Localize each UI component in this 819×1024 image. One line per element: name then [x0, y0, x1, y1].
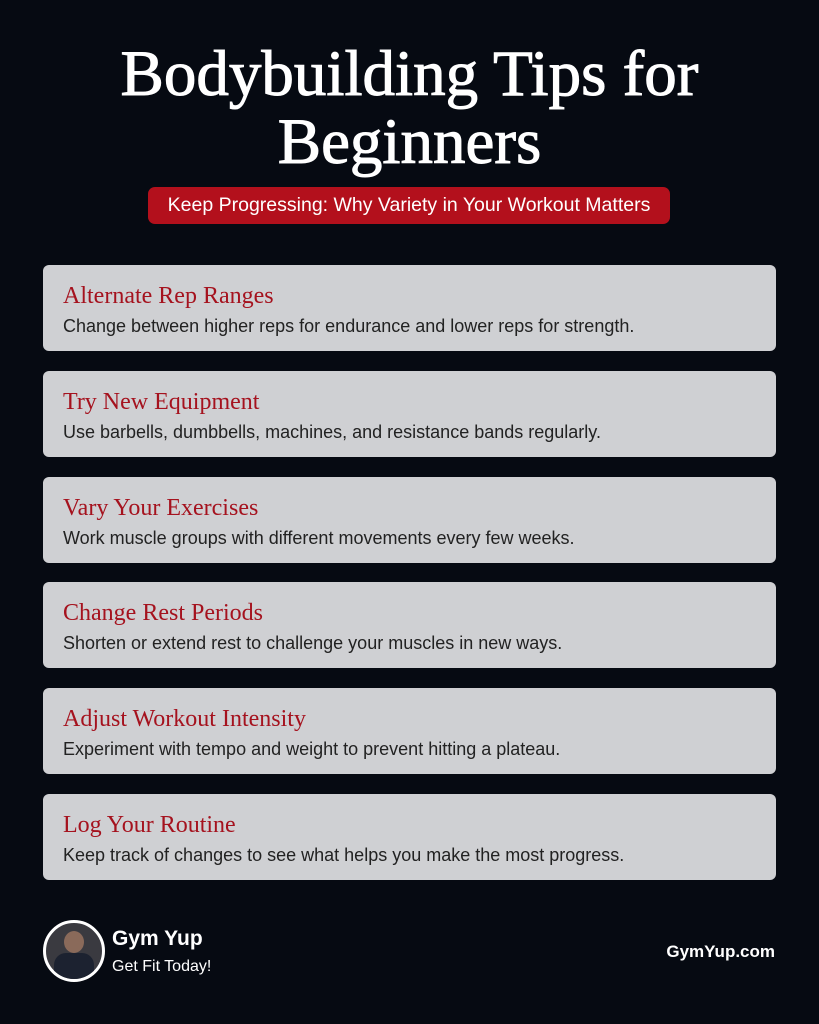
card: change rest periods	[43, 582, 776, 668]
card: vary your exercises: Vary Your Exercises	[63, 495, 258, 521]
card: adjust workout intensity: Experiment with tempo and weight to prevent hitting a plateau.	[63, 739, 560, 759]
card: log your routine	[43, 794, 776, 880]
subtitle pill	[148, 187, 670, 224]
subtitle pill: Keep Progressing: Why Variety in Your Workout Matters	[168, 194, 650, 216]
card: change rest periods: Change Rest Periods	[63, 600, 263, 626]
card: change rest periods: Shorten or extend rest to challenge your muscles in new ways.	[63, 633, 562, 653]
brand name: Gym Yup	[112, 927, 203, 950]
card: adjust workout intensity: Adjust Workout Intensity	[63, 706, 306, 732]
card: try new equipment: Use barbells, dumbbells, machines, and resistance bands regularly.	[63, 422, 601, 442]
card: log your routine: Keep track of changes to see what helps you make the most progress.	[63, 845, 624, 865]
card: vary your exercises: Work muscle groups with different movements every few weeks.	[63, 528, 575, 548]
website: GymYup.com	[666, 942, 775, 961]
card: adjust workout intensity	[43, 688, 776, 774]
card: vary your exercises	[43, 477, 776, 563]
title: Beginners	[278, 106, 541, 178]
card: log your routine: Log Your Routine	[63, 812, 236, 838]
title	[121, 38, 698, 178]
card: alternate rep ranges	[43, 265, 776, 351]
icon: avatar	[43, 920, 105, 982]
card: try new equipment: Try New Equipment	[63, 389, 259, 415]
tagline: Get Fit Today!	[112, 958, 211, 975]
card: try new equipment	[43, 371, 776, 457]
card: alternate rep ranges: Alternate Rep Ranges	[63, 283, 274, 309]
card: alternate rep ranges: Change between higher reps for endurance and lower reps for strength.	[63, 316, 634, 336]
title: Bodybuilding Tips for	[121, 38, 698, 110]
